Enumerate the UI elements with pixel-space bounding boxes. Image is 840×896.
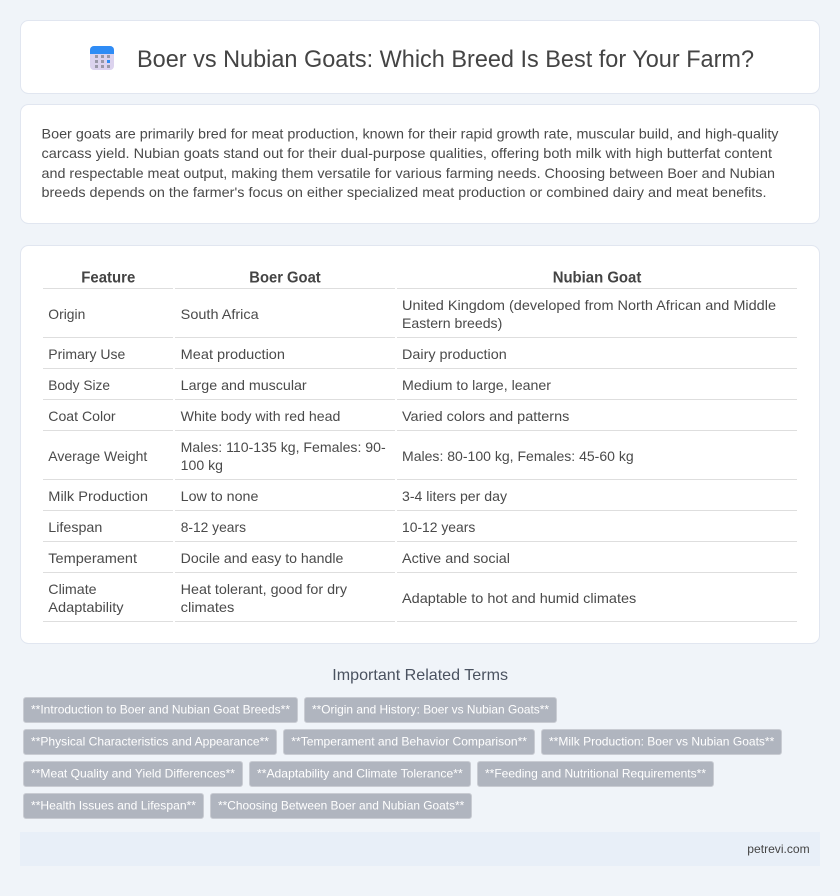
row: primary use: Primary Use [48, 346, 126, 362]
tag: **Feeding and Nutritional Requirements** [485, 767, 706, 781]
tag list: related terms [24, 698, 782, 818]
tag: **Health Issues and Lifespan** [31, 799, 196, 813]
row: origin: United Kingdom (developed from North African and Middle [402, 297, 776, 313]
tag [24, 730, 276, 754]
row: coat color: Coat Color [48, 408, 116, 424]
tag: **Origin and History: Boer vs Nubian Goats** [312, 703, 549, 717]
table header row: Boer Goat [249, 270, 321, 287]
row: average weight: 100 kg [181, 457, 223, 473]
tag: **Adaptability and Climate Tolerance** [257, 767, 463, 781]
tag [284, 730, 534, 754]
row: climate adaptability: Adaptability [48, 599, 124, 615]
row: average weight: Average Weight [48, 448, 147, 464]
text block: introduction paragraph: and respectable meat output, making them versatile for various farming needs. Choosing between Boer and Nubian [42, 165, 775, 181]
row: average weight: Males: 80-100 kg, Females: 45-60 kg [402, 448, 634, 464]
tag: **Meat Quality and Yield Differences** [31, 767, 235, 781]
row: lifespan: 10-12 years [402, 519, 475, 535]
row: primary use [48, 346, 507, 362]
row: origin: Eastern breeds) [402, 315, 502, 331]
row: temperament: Docile and easy to handle [181, 550, 344, 566]
row: milk production [48, 488, 507, 504]
text block: introduction paragraph: breeds depends on the farmer's focus on either specialized meat production or combined dairy and meat benefits. [42, 184, 766, 200]
row: origin: Origin [48, 306, 85, 322]
heading: important related terms: Important Related Terms [332, 667, 508, 684]
tag [478, 762, 714, 786]
row: body size: Body Size [48, 377, 110, 393]
row: milk production: Low to none [181, 488, 259, 504]
panel: introduction [20, 104, 820, 224]
table header row [81, 270, 642, 287]
row: average weight [48, 439, 634, 473]
panel: header [20, 20, 820, 94]
table header row: Nubian Goat [553, 270, 642, 287]
tag: **Temperament and Behavior Comparison** [291, 735, 527, 749]
tag [24, 762, 242, 786]
text block: introduction paragraph: Boer goats are primarily bred for meat production, known for their rapid growth rate, muscular build, and high-quality [42, 126, 779, 142]
row: average weight: Males: 110-135 kg, Females: 90- [181, 439, 386, 455]
row: body size: Large and muscular [181, 377, 307, 393]
row: coat color: White body with red head [181, 408, 340, 424]
title: Boer vs Nubian Goats: Which Breed Is Best for Your Farm? [137, 46, 754, 73]
row: temperament [48, 550, 510, 566]
row: climate adaptability [48, 581, 636, 615]
tag [210, 794, 472, 818]
row: origin [48, 297, 776, 331]
row: body size: Medium to large, leaner [402, 377, 551, 393]
tag [250, 762, 470, 786]
row: primary use: Meat production [181, 346, 285, 362]
tag: **Milk Production: Boer vs Nubian Goats** [549, 735, 775, 749]
row: temperament: Active and social [402, 550, 510, 566]
row: temperament: Temperament [48, 550, 137, 566]
row: primary use: Dairy production [402, 346, 507, 362]
row: climate adaptability: Adaptable to hot and humid climates [402, 590, 636, 606]
tag [24, 794, 204, 818]
panel: comparison table [20, 246, 820, 644]
tag: **Physical Characteristics and Appearance** [31, 735, 269, 749]
row: lifespan: 8-12 years [181, 519, 246, 535]
row: lifespan [48, 519, 475, 535]
row: coat color [48, 408, 569, 424]
footer [20, 832, 820, 866]
row: climate adaptability: Climate [48, 581, 97, 597]
tag [24, 698, 298, 722]
text block: introduction paragraph [42, 126, 779, 200]
row: body size [48, 377, 551, 393]
table header row: Feature [81, 270, 135, 287]
row: lifespan: Lifespan [48, 519, 102, 535]
tag [542, 730, 782, 754]
row: coat color: Varied colors and patterns [402, 408, 569, 424]
tag [304, 698, 556, 722]
row: milk production: 3-4 liters per day [402, 488, 507, 504]
row: climate adaptability: Heat tolerant, good for dry [181, 581, 347, 597]
row: origin: South Africa [181, 306, 259, 322]
row: milk production: Milk Production [48, 488, 148, 504]
row: climate adaptability: climates [181, 599, 234, 615]
footer source text: petrevi.com [747, 842, 810, 856]
text block: introduction paragraph: carcass yield. Nubian goats stand out for their dual-purpose qualities, offering both milk with high butterfat content [42, 145, 772, 161]
icon: calendar [90, 46, 114, 70]
tag: **Choosing Between Boer and Nubian Goats** [218, 799, 465, 813]
tag: **Introduction to Boer and Nubian Goat Breeds** [31, 703, 290, 717]
